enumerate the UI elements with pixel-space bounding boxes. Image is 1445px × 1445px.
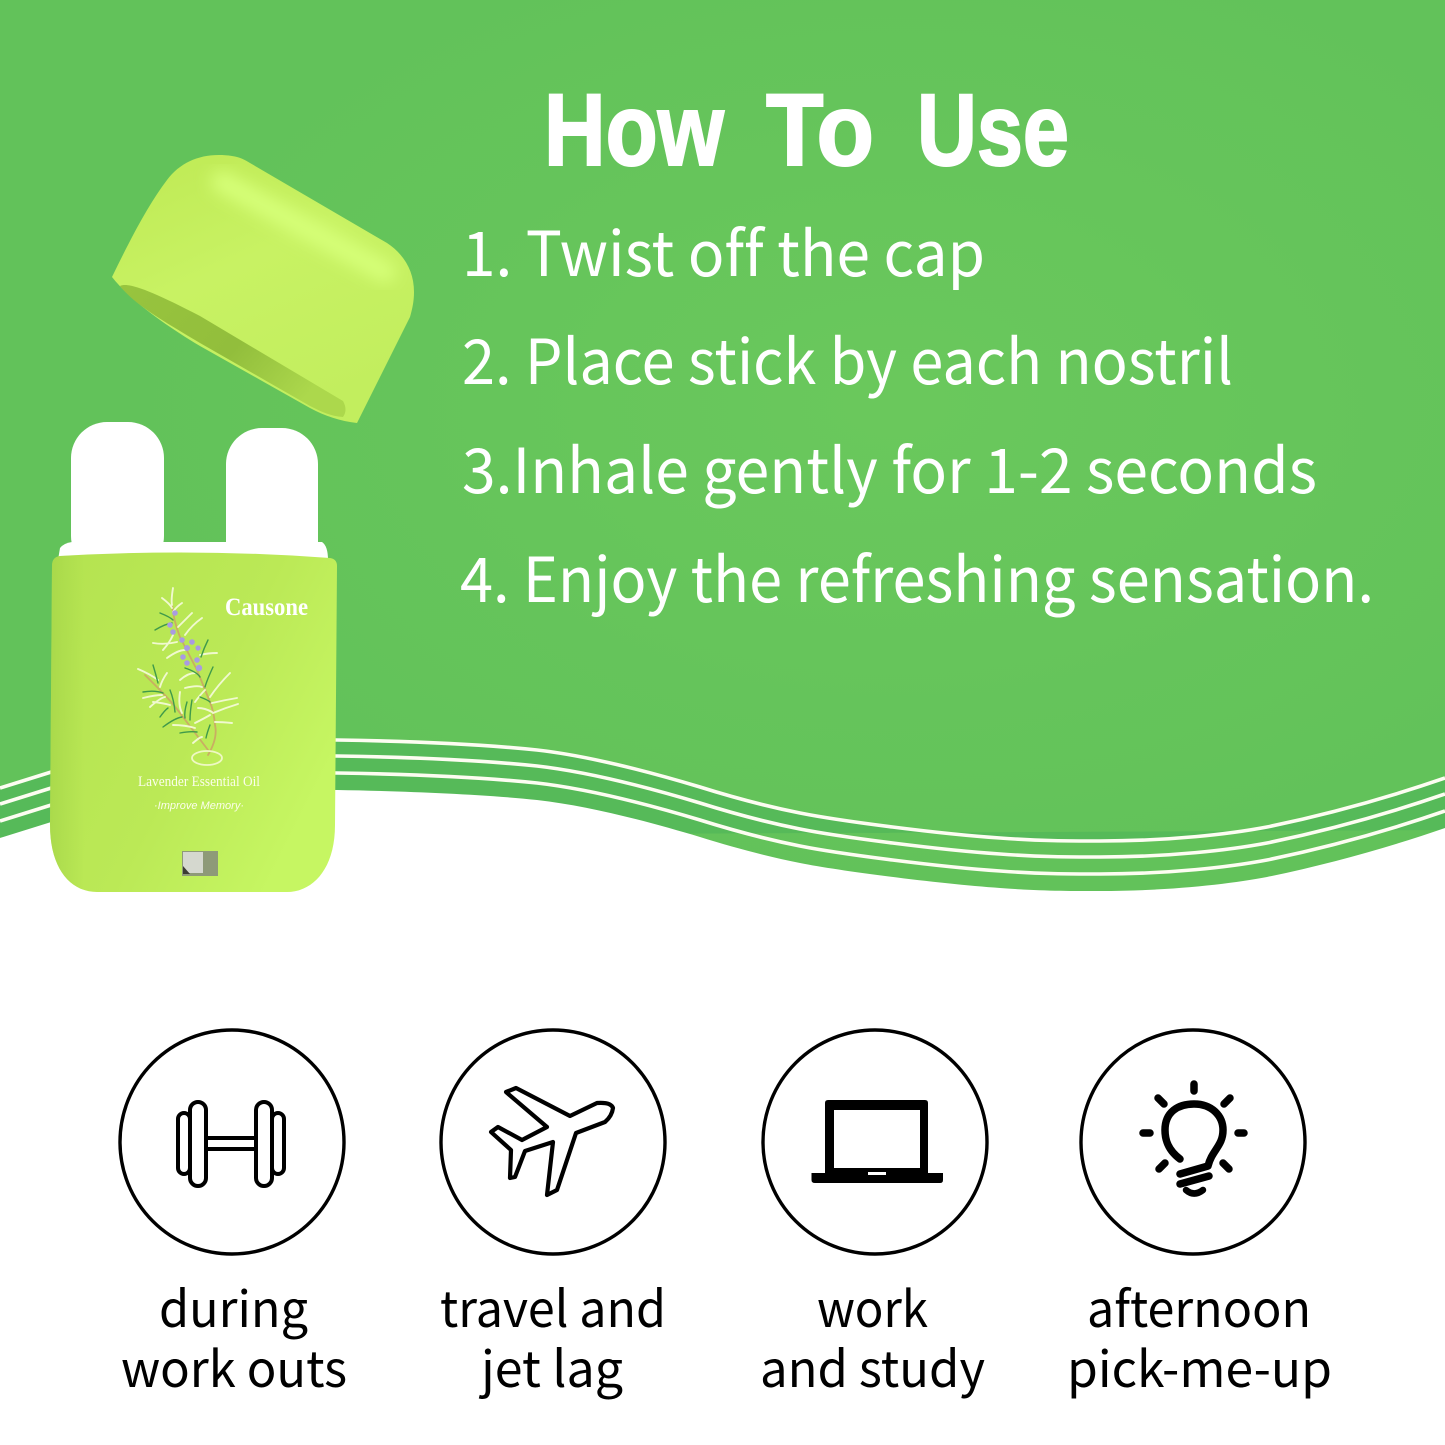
step 4: 4. Enjoy the refreshing sensation.	[460, 530, 1374, 620]
icon: airplane	[491, 1088, 613, 1195]
usage: travel and jet lag	[440, 1030, 666, 1402]
cap highlight	[222, 182, 385, 272]
circle	[441, 1030, 665, 1254]
product tagline: ·Improve Memory·	[154, 800, 244, 812]
wave line 2	[0, 756, 1445, 857]
usage: during work outs	[120, 1030, 347, 1402]
pale leaves	[138, 588, 238, 743]
title: To	[766, 73, 874, 187]
title	[544, 73, 1069, 187]
wave: green bands with white lines	[0, 740, 1445, 1445]
stems	[145, 605, 216, 755]
product name: Lavender Essential Oil	[138, 774, 260, 790]
brand name: Causone	[225, 594, 308, 621]
circle	[120, 1030, 344, 1254]
label: travel and	[440, 1270, 666, 1342]
step 1: 1. Twist off the cap	[462, 204, 985, 294]
dark leaves	[143, 613, 213, 738]
wave line 1	[0, 740, 1445, 841]
product: cap	[112, 155, 414, 423]
label	[1067, 1270, 1332, 1402]
label: jet lag	[478, 1330, 623, 1402]
usage: afternoon pick-me-up	[1067, 1030, 1332, 1402]
wave band fill	[0, 740, 1445, 841]
label: afternoon	[1087, 1270, 1311, 1342]
label: work	[817, 1270, 928, 1342]
icon: dumbbell	[178, 1102, 284, 1186]
collar	[58, 542, 328, 560]
body left shade	[50, 552, 337, 892]
body	[50, 552, 337, 892]
icon: light bulb	[1143, 1084, 1244, 1194]
steps text block	[460, 204, 1374, 620]
lavender flowers	[167, 610, 202, 671]
stick left	[71, 422, 164, 572]
title: Use	[917, 73, 1069, 187]
label	[760, 1270, 985, 1402]
label	[121, 1270, 347, 1402]
cap inner opening	[120, 285, 346, 417]
label: and study	[760, 1330, 985, 1402]
title: How	[544, 73, 725, 187]
circle	[763, 1030, 987, 1254]
slot	[182, 851, 218, 876]
step 2: 2. Place stick by each nostril	[462, 312, 1233, 402]
product: stick body	[50, 422, 337, 892]
label: pick-me-up	[1067, 1330, 1332, 1402]
label: during	[159, 1270, 308, 1342]
circle	[1081, 1030, 1305, 1254]
green background panel	[0, 0, 1445, 900]
icon: laptop	[812, 1100, 943, 1183]
wave line 3	[0, 773, 1445, 874]
step 3: 3.Inhale gently for 1-2 seconds	[462, 421, 1317, 511]
white area below wave	[0, 790, 1445, 1445]
plant illustration	[138, 588, 238, 765]
cap shell	[112, 155, 414, 423]
label: work outs	[121, 1330, 347, 1402]
usage: work and study	[760, 1030, 987, 1402]
stick right	[226, 428, 318, 578]
base ring	[192, 751, 222, 765]
label	[440, 1270, 666, 1402]
